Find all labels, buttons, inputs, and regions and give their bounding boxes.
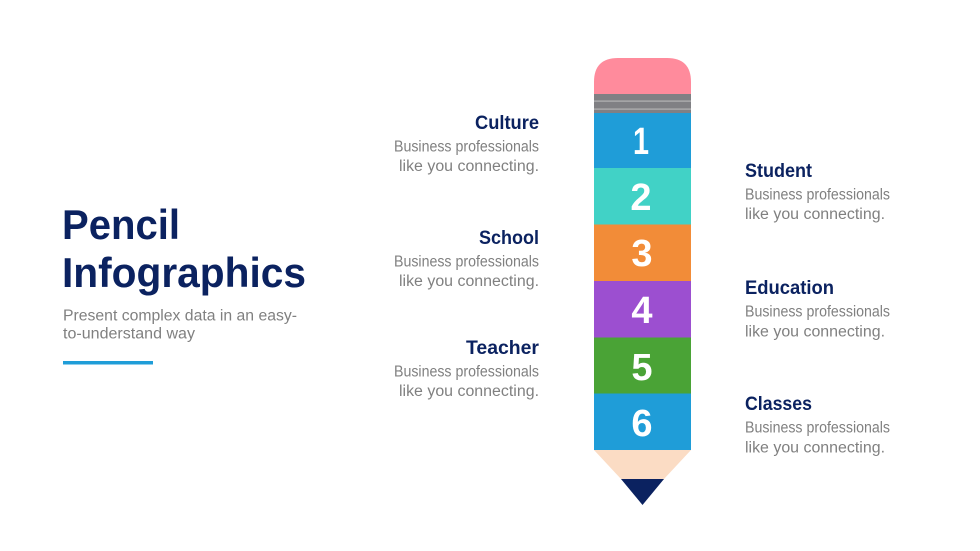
title: Infographics	[62, 249, 306, 296]
label: School: Business professionals	[394, 254, 539, 270]
label: Education: Education	[745, 277, 834, 299]
segment 2: 2	[630, 177, 652, 219]
label: Education: like you connecting.	[745, 324, 885, 340]
title: Pencil	[62, 201, 180, 248]
label: Classes	[745, 393, 890, 456]
segment 4	[594, 281, 691, 338]
pencil wood tip	[594, 450, 691, 479]
label: School	[394, 227, 539, 290]
label: Culture: Culture	[475, 112, 539, 134]
segment 5	[594, 338, 691, 394]
label: Teacher	[394, 337, 539, 400]
eraser	[594, 58, 691, 94]
label: Culture: Business professionals	[394, 138, 539, 156]
label: Classes: Business professionals	[745, 420, 890, 436]
label: Classes: like you connecting.	[745, 440, 885, 456]
segment 5: 5	[631, 347, 653, 389]
label: Classes: Classes	[745, 393, 812, 415]
label: Teacher: Business professionals	[394, 364, 539, 380]
label: Student: Business professionals	[745, 186, 890, 204]
segment 1	[594, 113, 691, 168]
title accent line	[63, 361, 153, 364]
label: Student	[745, 160, 890, 223]
segment 6: 6	[631, 403, 653, 445]
label: School: School	[479, 227, 539, 249]
label: Culture: like you connecting.	[399, 158, 539, 175]
label: Education	[745, 277, 890, 340]
ferrule	[594, 94, 691, 113]
label: Education: Business professionals	[745, 304, 890, 320]
title	[62, 201, 306, 296]
pencil	[594, 58, 691, 505]
segment 3: 3	[631, 233, 653, 275]
label: Teacher: like you connecting.	[399, 383, 539, 400]
pencil lead	[621, 479, 664, 505]
label: Teacher: Teacher	[466, 337, 539, 359]
subtitle: to-understand way	[63, 326, 195, 342]
label: Student: like you connecting.	[745, 206, 885, 223]
label: Student: Student	[745, 160, 812, 182]
segment 4: 4	[631, 290, 653, 332]
subtitle: Present complex data in an easy-	[63, 308, 297, 324]
label: School: like you connecting.	[399, 273, 539, 290]
segment 3	[594, 224, 691, 281]
label: Culture	[394, 112, 539, 175]
segment 6	[594, 394, 691, 450]
segment 1: 1	[633, 121, 649, 163]
subtitle	[63, 308, 297, 342]
segment 2	[594, 168, 691, 224]
